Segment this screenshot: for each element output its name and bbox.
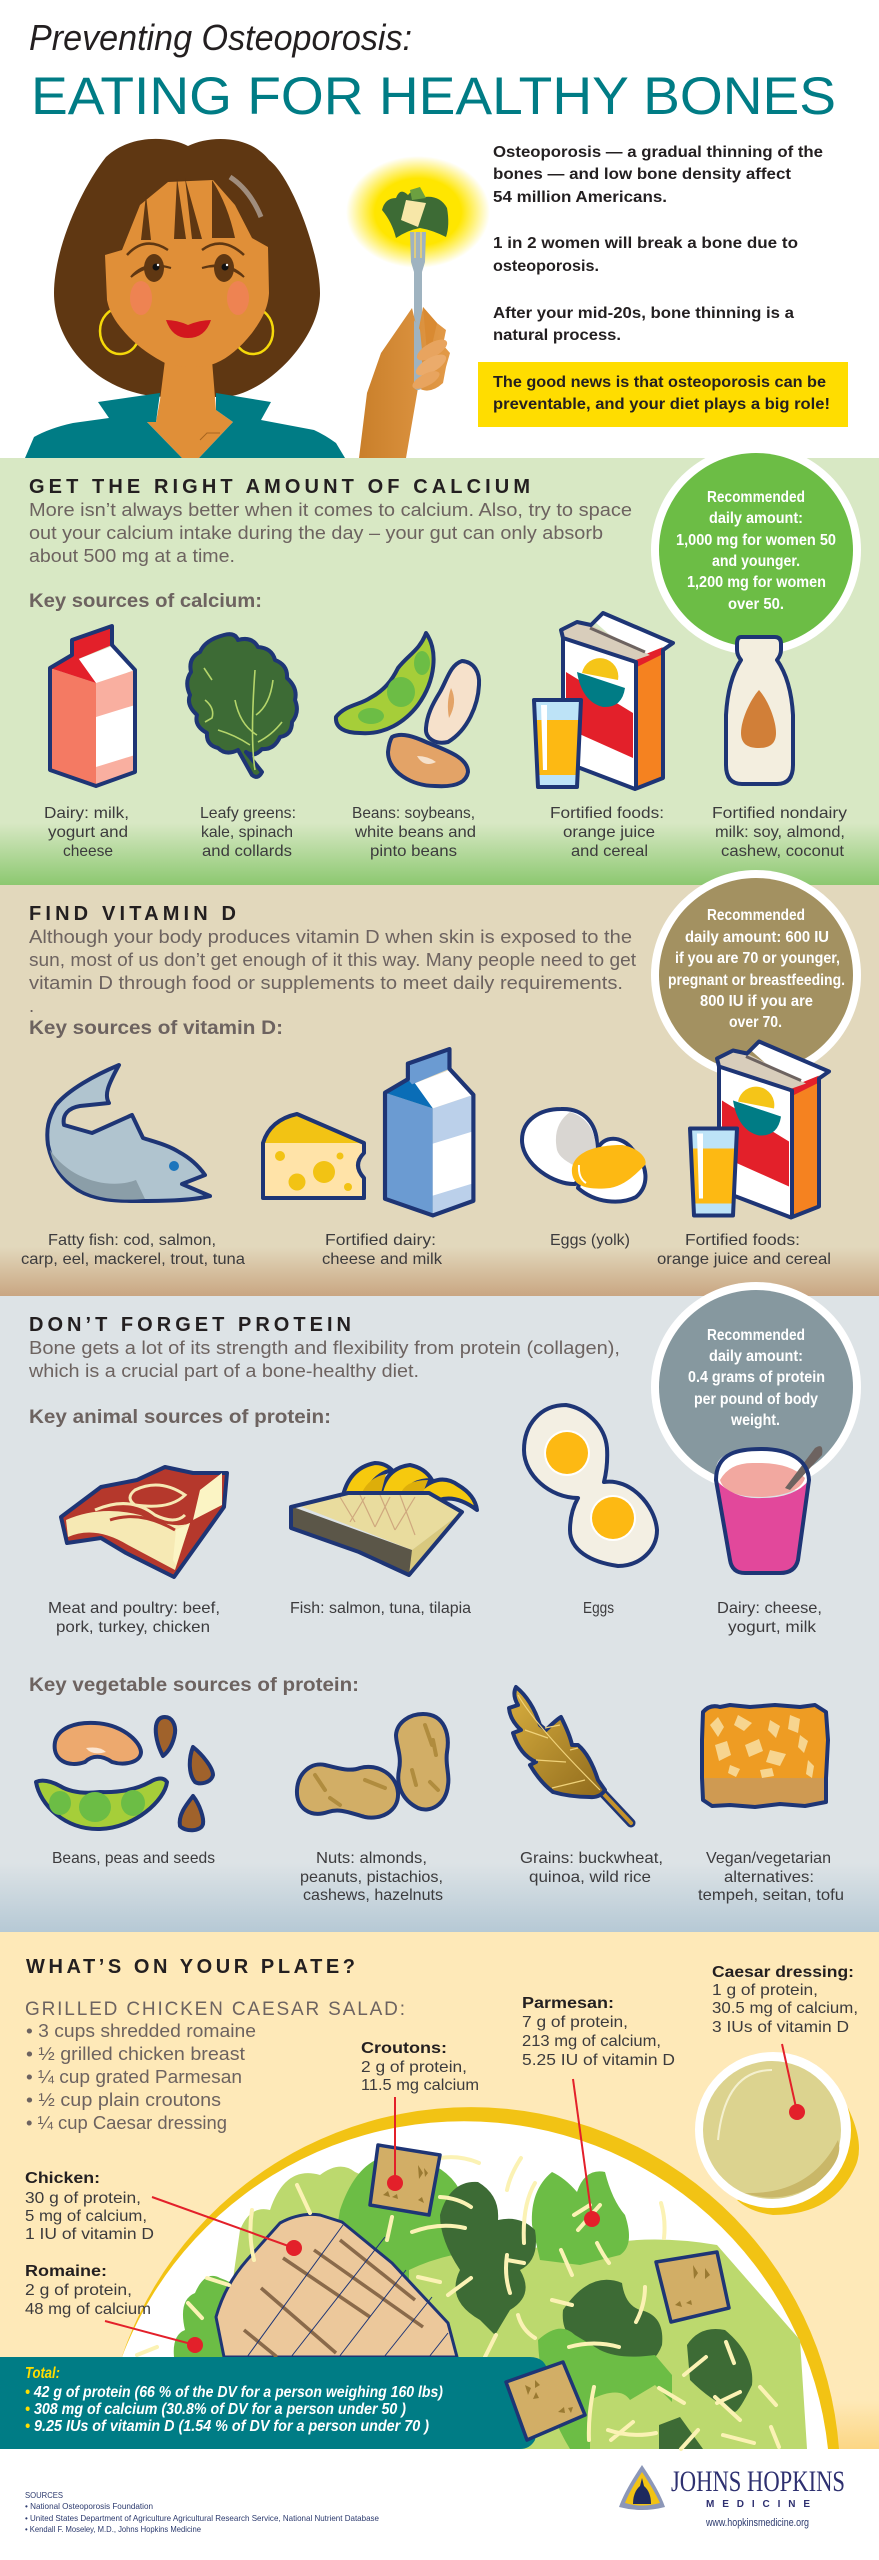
intro facts: 1 in 2 women will break a bone due to — [493, 235, 798, 252]
panel: vitamin D — [0, 870, 879, 1296]
icon: kale leaf — [187, 634, 297, 777]
labels: calcium sources: Fortified nondairy — [712, 805, 847, 822]
labels: animal protein sources: Dairy: cheese, — [717, 1600, 822, 1617]
callout: recommended vitamin D amount: Recommended — [707, 907, 805, 924]
labels: vegetable protein sources: Grains: buckwheat, — [520, 1850, 663, 1867]
intro facts — [493, 144, 823, 344]
callout: recommended protein amount: weight. — [730, 1412, 780, 1429]
panel: totals: • 9.25 IUs of vitamin D (1.54 % of DV for a person under 70 ) — [25, 2418, 429, 2435]
callout: recommended protein amount: daily amount: — [709, 1348, 803, 1365]
labels: vegetable protein sources: alternatives: — [724, 1869, 814, 1886]
intro facts: natural process. — [493, 327, 621, 344]
labels: calcium sources: orange juice — [563, 824, 655, 841]
logo: Johns Hopkins Medicine — [619, 2465, 845, 2529]
icon: tempeh — [702, 1705, 828, 1807]
text: protein intro: which is a crucial part of a bone-healthy diet. — [28, 1360, 419, 1381]
labels: vitamin D sources: carp, eel, mackerel, trout, tuna — [21, 1251, 245, 1268]
labels: calcium sources: yogurt and — [48, 824, 128, 841]
labels: calcium sources: white beans and — [354, 824, 476, 841]
text: vitamin D intro: sun, most of us don’t get enough of it this way. Many people need to get — [29, 949, 636, 970]
annotation: croutons: 2 g of protein, — [361, 2059, 467, 2076]
labels: calcium sources — [44, 805, 847, 860]
labels: vegetable protein sources — [52, 1850, 844, 1904]
annotation: croutons — [361, 2040, 479, 2191]
icon: beans — [336, 633, 479, 786]
labels: calcium sources: and collards — [202, 843, 292, 860]
dressing cup — [695, 2052, 859, 2215]
icon: milk carton — [50, 626, 135, 786]
labels: animal protein sources: yogurt, milk — [728, 1619, 817, 1636]
panel: totals — [0, 2357, 548, 2449]
icon: milk carton blue — [385, 1049, 473, 1215]
annotation: romaine — [25, 2263, 203, 2353]
icon: yogurt cup — [716, 1446, 822, 1573]
text: salad ingredients: • ¼ cup grated Parmesan — [26, 2066, 242, 2087]
annotation: romaine: Romaine: — [25, 2263, 107, 2280]
labels: calcium sources: Leafy greens: — [200, 805, 296, 822]
text: salad ingredients — [25, 1999, 405, 2133]
heading: vitamin D: FIND VITAMIN D — [29, 903, 236, 925]
subheading: animal sources: Key animal sources of protein: — [29, 1407, 331, 1428]
callout: recommended vitamin D amount: pregnant or breastfeeding. — [668, 972, 845, 989]
panel: protein — [0, 1282, 879, 1932]
icon: fish with lemon — [291, 1463, 477, 1575]
annotation: parmesan: 7 g of protein, — [522, 2014, 628, 2031]
icon: peanuts — [297, 1714, 448, 1818]
labels: vegetable protein sources: tempeh, seitan, tofu — [698, 1887, 844, 1904]
annotation: chicken — [25, 2170, 302, 2256]
text: salad ingredients: • ¼ cup Caesar dressing — [26, 2112, 227, 2133]
labels: vitamin D sources: Fortified foods: — [685, 1232, 800, 1249]
callout: good news: preventable, and your diet plays a big role! — [493, 396, 830, 413]
labels: animal protein sources: Fish: salmon, tuna, tilapia — [290, 1600, 471, 1617]
text: vitamin D intro: vitamin D through food or supplements to meet daily requirements. — [29, 972, 623, 993]
annotation: chicken: 5 mg of calcium, — [25, 2208, 147, 2225]
icon: beans, peas and seeds — [36, 1717, 213, 1830]
subheading: key sources of calcium: Key sources of calcium: — [29, 591, 262, 612]
panel: totals: Total: — [25, 2365, 60, 2382]
labels: calcium sources: cashew, coconut — [721, 843, 845, 860]
text: sources: • National Osteoporosis Foundation — [25, 2501, 153, 2511]
labels: vegetable protein sources: peanuts, pistachios, — [300, 1869, 443, 1886]
labels: calcium sources: and cereal — [571, 843, 648, 860]
callout: recommended calcium amount: Recommended — [707, 489, 805, 506]
icon: cereal and juice — [534, 613, 673, 789]
subheading: vegetable sources: Key vegetable sources of protein: — [29, 1675, 359, 1696]
callout: recommended calcium amount — [651, 445, 861, 655]
labels: calcium sources: milk: soy, almond, — [715, 824, 845, 841]
chicken breast — [216, 2214, 457, 2357]
annotation: chicken: Chicken: — [25, 2170, 100, 2187]
heading: protein: DON’T FORGET PROTEIN — [29, 1314, 351, 1336]
labels: vitamin D sources: Fatty fish: cod, salmon, — [48, 1232, 216, 1249]
callout: recommended protein amount: per pound of body — [694, 1391, 818, 1408]
labels: vegetable protein sources: cashews, hazelnuts — [303, 1887, 443, 1904]
intro facts: 54 million Americans. — [493, 189, 667, 206]
text: calcium intro: More isn’t always better when it comes to calcium. Also, try to space — [29, 499, 632, 520]
callout: recommended calcium amount: daily amount: — [709, 510, 803, 527]
icon: cereal and juice — [690, 1042, 829, 1218]
intro facts: Osteoporosis — a gradual thinning of the — [493, 144, 823, 161]
labels: calcium sources: kale, spinach — [201, 824, 293, 841]
text: protein intro — [28, 1337, 620, 1381]
title: Preventing Osteoporosis: Preventing Osteoporosis: — [29, 17, 412, 58]
text: protein intro: Bone gets a lot of its strength and flexibility from protein (collagen), — [29, 1337, 620, 1358]
annotation: caesar dressing: 1 g of protein, — [712, 1982, 818, 1999]
annotation: caesar dressing: 3 IUs of vitamin D — [712, 2019, 849, 2036]
text: sources: SOURCES — [25, 2490, 63, 2500]
labels: vitamin D sources: orange juice and cereal — [657, 1251, 831, 1268]
title: Eating for healthy bones: EATING FOR HEALTHY BONES — [31, 67, 836, 126]
text: sources: • Kendall F. Moseley, M.D., Johns Hopkins Medicine — [25, 2524, 201, 2534]
annotation: caesar dressing — [712, 1964, 858, 2120]
intro facts: After your mid-20s, bone thinning is a — [493, 305, 794, 322]
illustration: woman with fork — [25, 139, 490, 458]
annotation: croutons: 11.5 mg calcium — [361, 2077, 479, 2094]
labels: animal protein sources: pork, turkey, chicken — [56, 1619, 210, 1636]
annotation: parmesan: 213 mg of calcium, — [522, 2033, 661, 2050]
annotation: caesar dressing: Caesar dressing: — [712, 1964, 854, 1981]
cheese shreds — [137, 2157, 779, 2449]
labels: vitamin D sources: Eggs (yolk) — [550, 1232, 630, 1249]
labels: calcium sources: pinto beans — [370, 843, 457, 860]
annotation: parmesan: 5.25 IU of vitamin D — [522, 2052, 675, 2069]
intro facts: bones — and low bone density affect — [493, 166, 791, 183]
text: vitamin D intro: Although your body produces vitamin D when skin is exposed to the — [29, 926, 632, 947]
text: salad ingredients: GRILLED CHICKEN CAESAR SALAD: — [25, 1999, 405, 2020]
icon: almond milk bottle — [726, 637, 793, 784]
callout: recommended vitamin D amount: 800 IU if you are — [700, 993, 813, 1010]
panel: what's on your plate — [0, 1932, 879, 2449]
callout: recommended protein amount — [651, 1282, 861, 1492]
labels: vitamin D sources — [21, 1232, 831, 1268]
annotation: caesar dressing: 30.5 mg of calcium, — [712, 2000, 858, 2017]
icon: wheat — [509, 1687, 631, 1823]
labels: calcium sources: Dairy: milk, — [44, 805, 129, 822]
heading: calcium: GET THE RIGHT AMOUNT OF CALCIUM — [29, 476, 530, 498]
annotation: romaine: 48 mg of calcium — [25, 2301, 151, 2318]
illustration: salad plate — [100, 2107, 839, 2449]
text: calcium intro: about 500 mg at a time. — [29, 545, 235, 566]
icon: fried eggs — [524, 1405, 657, 1566]
text: calcium intro — [29, 499, 632, 566]
panel: totals: • 42 g of protein (66 % of the DV for a person weighing 160 lbs) — [25, 2384, 443, 2401]
callout: recommended calcium amount: and younger. — [712, 553, 800, 570]
labels: animal protein sources: Eggs — [583, 1600, 614, 1617]
annotation: parmesan: Parmesan: — [522, 1995, 614, 2012]
labels: vegetable protein sources: Nuts: almonds, — [316, 1850, 427, 1867]
callout: recommended vitamin D amount: if you are 70 or younger, — [675, 950, 840, 967]
callout: good news — [478, 362, 848, 427]
annotation: chicken: 30 g of protein, — [25, 2190, 141, 2207]
annotation: romaine: 2 g of protein, — [25, 2282, 132, 2299]
text: sources — [25, 2490, 379, 2534]
callout: recommended protein amount: Recommended — [707, 1327, 805, 1344]
annotation: parmesan — [522, 1995, 675, 2227]
labels: calcium sources: Beans: soybeans, — [352, 805, 475, 822]
text: salad ingredients: • ½ grilled chicken breast — [26, 2043, 245, 2064]
callout: recommended calcium amount: over 50. — [728, 596, 784, 613]
text: salad ingredients: • 3 cups shredded romaine — [26, 2020, 256, 2041]
labels: vitamin D sources: Fortified dairy: — [325, 1232, 436, 1249]
icon: egg with yolk — [522, 1109, 646, 1202]
logo: Johns Hopkins Medicine: MEDICINE — [706, 2499, 810, 2510]
labels: calcium sources: Fortified foods: — [550, 805, 664, 822]
text: calcium intro: out your calcium intake during the day – your gut can only absorb — [29, 522, 603, 543]
logo: Johns Hopkins Medicine: www.hopkinsmedicine.org — [705, 2517, 809, 2529]
labels: vegetable protein sources: Vegan/vegetarian — [706, 1850, 831, 1867]
callout: recommended vitamin D amount — [651, 870, 861, 1080]
labels: vegetable protein sources: quinoa, wild rice — [529, 1869, 651, 1886]
icon: steak — [61, 1467, 227, 1577]
text: vitamin D intro — [29, 926, 636, 1016]
callout: recommended calcium amount: 1,000 mg for women 50 — [676, 532, 836, 549]
icon: fish — [47, 1065, 210, 1201]
text: vitamin D intro: . — [29, 995, 34, 1016]
callout: recommended vitamin D amount: over 70. — [729, 1014, 782, 1031]
labels: animal protein sources: Meat and poultry: beef, — [48, 1600, 220, 1617]
text: sources: • United States Department of Agriculture Agricultural Research Service, National Nutrient Database — [25, 2513, 379, 2523]
intro facts: osteoporosis. — [493, 258, 599, 275]
annotation: chicken: 1 IU of vitamin D — [25, 2226, 154, 2243]
text: salad ingredients: • ½ cup plain croutons — [26, 2089, 221, 2110]
annotation: croutons: Croutons: — [361, 2040, 447, 2057]
crouton — [656, 2252, 729, 2322]
callout: good news: The good news is that osteoporosis can be — [493, 374, 826, 391]
callout: recommended protein amount: 0.4 grams of protein — [688, 1369, 825, 1386]
labels: vitamin D sources: cheese and milk — [322, 1251, 443, 1268]
labels: vegetable protein sources: Beans, peas and seeds — [52, 1850, 215, 1867]
panel: calcium — [0, 445, 879, 885]
icon: cheese — [263, 1114, 364, 1198]
heading: plate: WHAT’S ON YOUR PLATE? — [26, 1956, 355, 1978]
callout: recommended vitamin D amount: daily amount: 600 IU — [685, 929, 829, 946]
callout: recommended calcium amount: 1,200 mg for women — [687, 574, 826, 591]
panel: totals: • 308 mg of calcium (30.8% of DV for a person under 50 ) — [25, 2401, 406, 2418]
crouton — [370, 2145, 440, 2215]
subheading: key sources of vitamin D: Key sources of vitamin D: — [29, 1018, 283, 1039]
labels: calcium sources: cheese — [63, 843, 113, 860]
labels: animal protein sources — [48, 1600, 822, 1636]
crouton over totals — [506, 2362, 585, 2440]
